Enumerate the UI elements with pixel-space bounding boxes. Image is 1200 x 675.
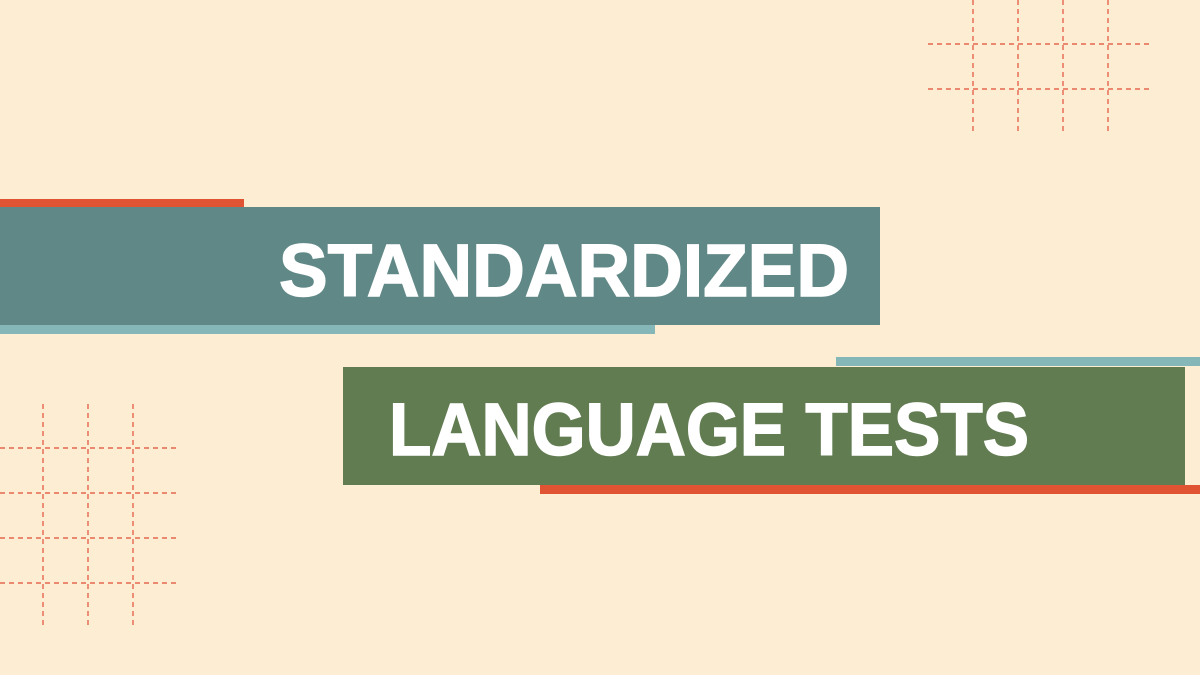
accent bar: light teal right [836, 357, 1200, 366]
accent bar: red top [0, 199, 244, 209]
banner: standardized [0, 207, 880, 325]
banner: language tests [343, 367, 1185, 485]
heading: language tests: LANGUAGE TESTS [389, 388, 1029, 471]
heading: standardized: STANDARDIZED [279, 229, 849, 312]
accent bar: light teal [0, 325, 655, 334]
accent bar: red bottom [540, 485, 1200, 494]
